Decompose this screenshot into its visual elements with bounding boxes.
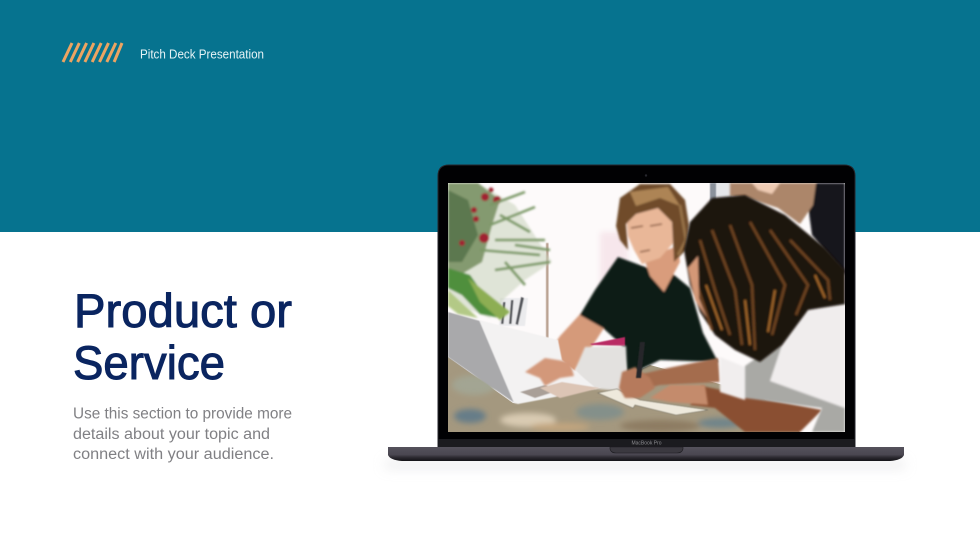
laptop mockup <box>385 165 905 468</box>
heading: Service <box>73 336 225 389</box>
table <box>448 357 800 432</box>
laptop lid <box>438 165 855 447</box>
man face <box>626 204 676 264</box>
header label: Pitch Deck Presentation <box>140 48 264 62</box>
man hair <box>616 184 689 262</box>
pen <box>636 342 645 378</box>
photo background <box>448 183 845 432</box>
man facial features <box>631 224 662 252</box>
man <box>556 183 719 372</box>
pillow accent <box>590 337 625 346</box>
body text: details about your topic and <box>73 426 270 443</box>
trackpad notch <box>610 447 683 453</box>
chair <box>499 297 528 326</box>
laptop shadow <box>385 461 905 468</box>
header band <box>0 0 980 232</box>
body text: connect with your audience. <box>73 446 274 463</box>
icon: diagonal stripes <box>63 43 122 62</box>
screen photo <box>448 183 845 432</box>
man neck <box>644 246 680 292</box>
heading <box>73 284 292 389</box>
hinge strip <box>438 439 855 447</box>
woman arm <box>690 386 822 432</box>
woman clothing <box>720 302 845 432</box>
body text: Use this section to provide more <box>73 406 292 422</box>
man arm <box>556 310 606 371</box>
plant <box>448 183 552 320</box>
woman hair <box>684 195 845 362</box>
laptop model label: MacBook Pro <box>631 440 662 446</box>
back person <box>730 183 845 275</box>
body text <box>73 406 292 463</box>
man hand <box>525 358 574 386</box>
woman hands <box>619 367 708 405</box>
silver laptop <box>448 312 600 404</box>
heading: Product or <box>74 284 292 337</box>
notebook <box>598 389 708 415</box>
laptop base <box>388 447 904 461</box>
camera <box>645 174 647 177</box>
man shirt <box>580 257 718 376</box>
